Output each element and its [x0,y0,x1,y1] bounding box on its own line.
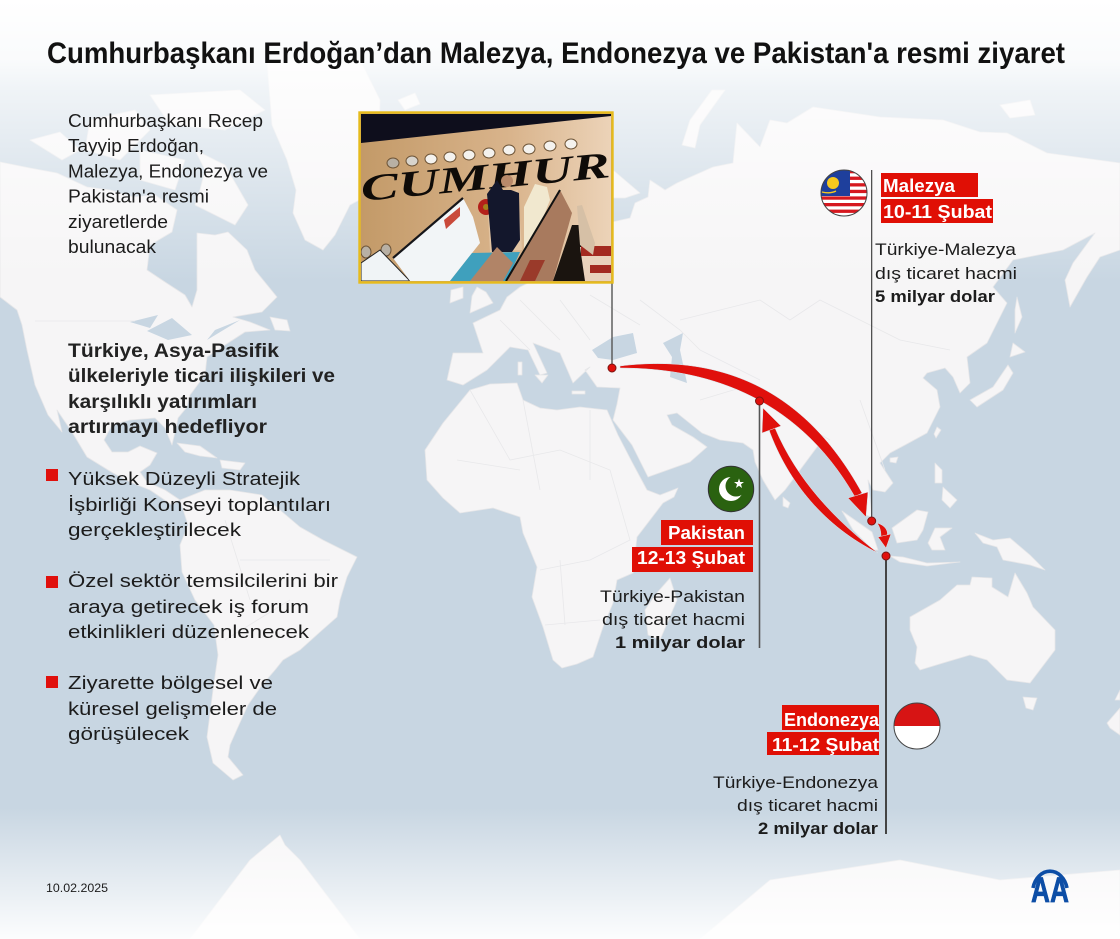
bullet 3 [46,673,277,744]
Africa [425,383,678,668]
photo: president at aircraft stairs: CUMHUR [359,145,612,210]
Arctic Canada islands [30,90,265,225]
New Guinea [975,533,1045,570]
bullet 2 [46,571,338,642]
North and Central America [0,162,277,505]
location dots [608,364,890,560]
inland seas [130,315,687,383]
Madagascar [645,578,677,640]
bullet 1: Yüksek Düzeyli Stratejik [68,469,301,489]
Greenland [267,60,380,250]
subheading: goal statement: Türkiye, Asya-Pasifik [68,341,279,362]
South America [180,490,357,780]
British Isles [450,287,493,313]
Sulawesi [928,528,952,550]
intro text block [68,111,268,257]
route arrow: Malaysia to Indonesia [877,523,891,548]
bullet 3: Ziyarette bölgesel ve [68,673,273,693]
route arrow: Turkey to Malaysia [620,364,868,517]
Pakistan date label: Pakistan [668,522,745,543]
Indonesia trade volume [713,773,879,838]
Pakistan trade volume: dış ticaret hacmi [602,610,745,629]
subheading: goal statement: artırmayı hedefliyor [68,417,268,438]
Indonesia trade volume: 2 milyar dolar [758,819,878,838]
Kola Peninsula [605,170,640,198]
Indonesia date label: Endonezya [784,709,880,730]
bullet 1: gerçekleştirilecek [68,520,242,540]
Australia [910,573,1055,683]
Java and Lesser Sunda [890,556,960,566]
Pakistan trade volume [600,587,745,652]
bullet 2: araya getirecek iş forum [68,597,309,617]
bullet 2: etkinlikleri düzenlenecek [68,622,310,642]
Indonesia trade volume: Türkiye-Endonezya [713,773,879,792]
Malaysia trade volume: Türkiye-Malezya [875,240,1017,259]
intro text block: Pakistan'a resmi [68,186,209,206]
Indonesia flag [893,702,941,749]
Sri Lanka [783,497,790,508]
Malaysia date label [881,173,993,223]
Pakistan flag [708,466,754,512]
bullet 1: İşbirliği Konseyi toplantıları [68,495,331,515]
Indonesia trade volume: dış ticaret hacmi [737,796,878,815]
bullet 3: küresel gelişmeler de [68,699,277,719]
Newfoundland and Caribbean [177,317,290,470]
Malaysia trade volume: 5 milyar dolar [875,287,995,306]
Philippines [935,463,957,508]
intro text block: Malezya, Endonezya ve [68,162,268,182]
subheading: goal statement: ülkeleriyle ticari ilişkileri ve [68,366,335,387]
bullet 3: görüşülecek [68,724,190,744]
Sicily, Sardinia, Crete, Cyprus [518,362,585,394]
Malaysia trade volume: dış ticaret hacmi [875,264,1017,283]
Hainan and Taiwan [890,427,941,463]
Eurasia [447,107,1120,517]
title: Cumhurbaşkanı Erdoğan’dan Malezya, Endonezya ve Pakistan'a resmi ziyaret [47,37,1065,70]
intro text block: Cumhurbaşkanı Recep [68,111,263,131]
Malaysia trade volume [875,240,1017,306]
subheading: goal statement: karşılıklı yatırımları [68,392,257,413]
Tasmania and New Zealand [1023,690,1120,735]
Malaysia date label: Malezya [883,175,956,196]
subheading: goal statement [68,341,335,438]
Pakistan date label: 12-13 Şubat [637,547,745,568]
Pakistan date label [632,520,753,572]
photo: president at aircraft stairs [359,112,612,282]
bullet 1 [46,469,331,540]
intro text block: ziyaretlerde [68,212,168,232]
Borneo [892,510,928,543]
intro text block: bulunacak [68,237,157,257]
leader lines [612,170,886,834]
Indonesia date label [767,705,880,755]
bullet 2: Özel sektör temsilcilerini bir [68,571,338,591]
Sumatra [842,511,878,550]
Japan and Sakhalin [970,297,1025,407]
Pakistan trade volume: 1 milyar dolar [615,633,745,652]
Malaysia date label: 10-11 Şubat [883,201,992,222]
Malaysia flag [820,169,870,216]
Indonesia date label: 11-12 Şubat [772,734,879,755]
route arrow: Indonesia to Pakistan [762,408,878,553]
intro text block: Tayyip Erdoğan, [68,136,204,156]
country borders [35,295,950,640]
Antarctica [190,835,1120,939]
date: 10.02.2025 [46,881,108,895]
logo: Anadolu Agency: AA [1031,871,1069,910]
Pakistan trade volume: Türkiye-Pakistan [600,587,745,606]
Iceland, Novaya Zemlya, Arctic islands [398,90,1035,148]
